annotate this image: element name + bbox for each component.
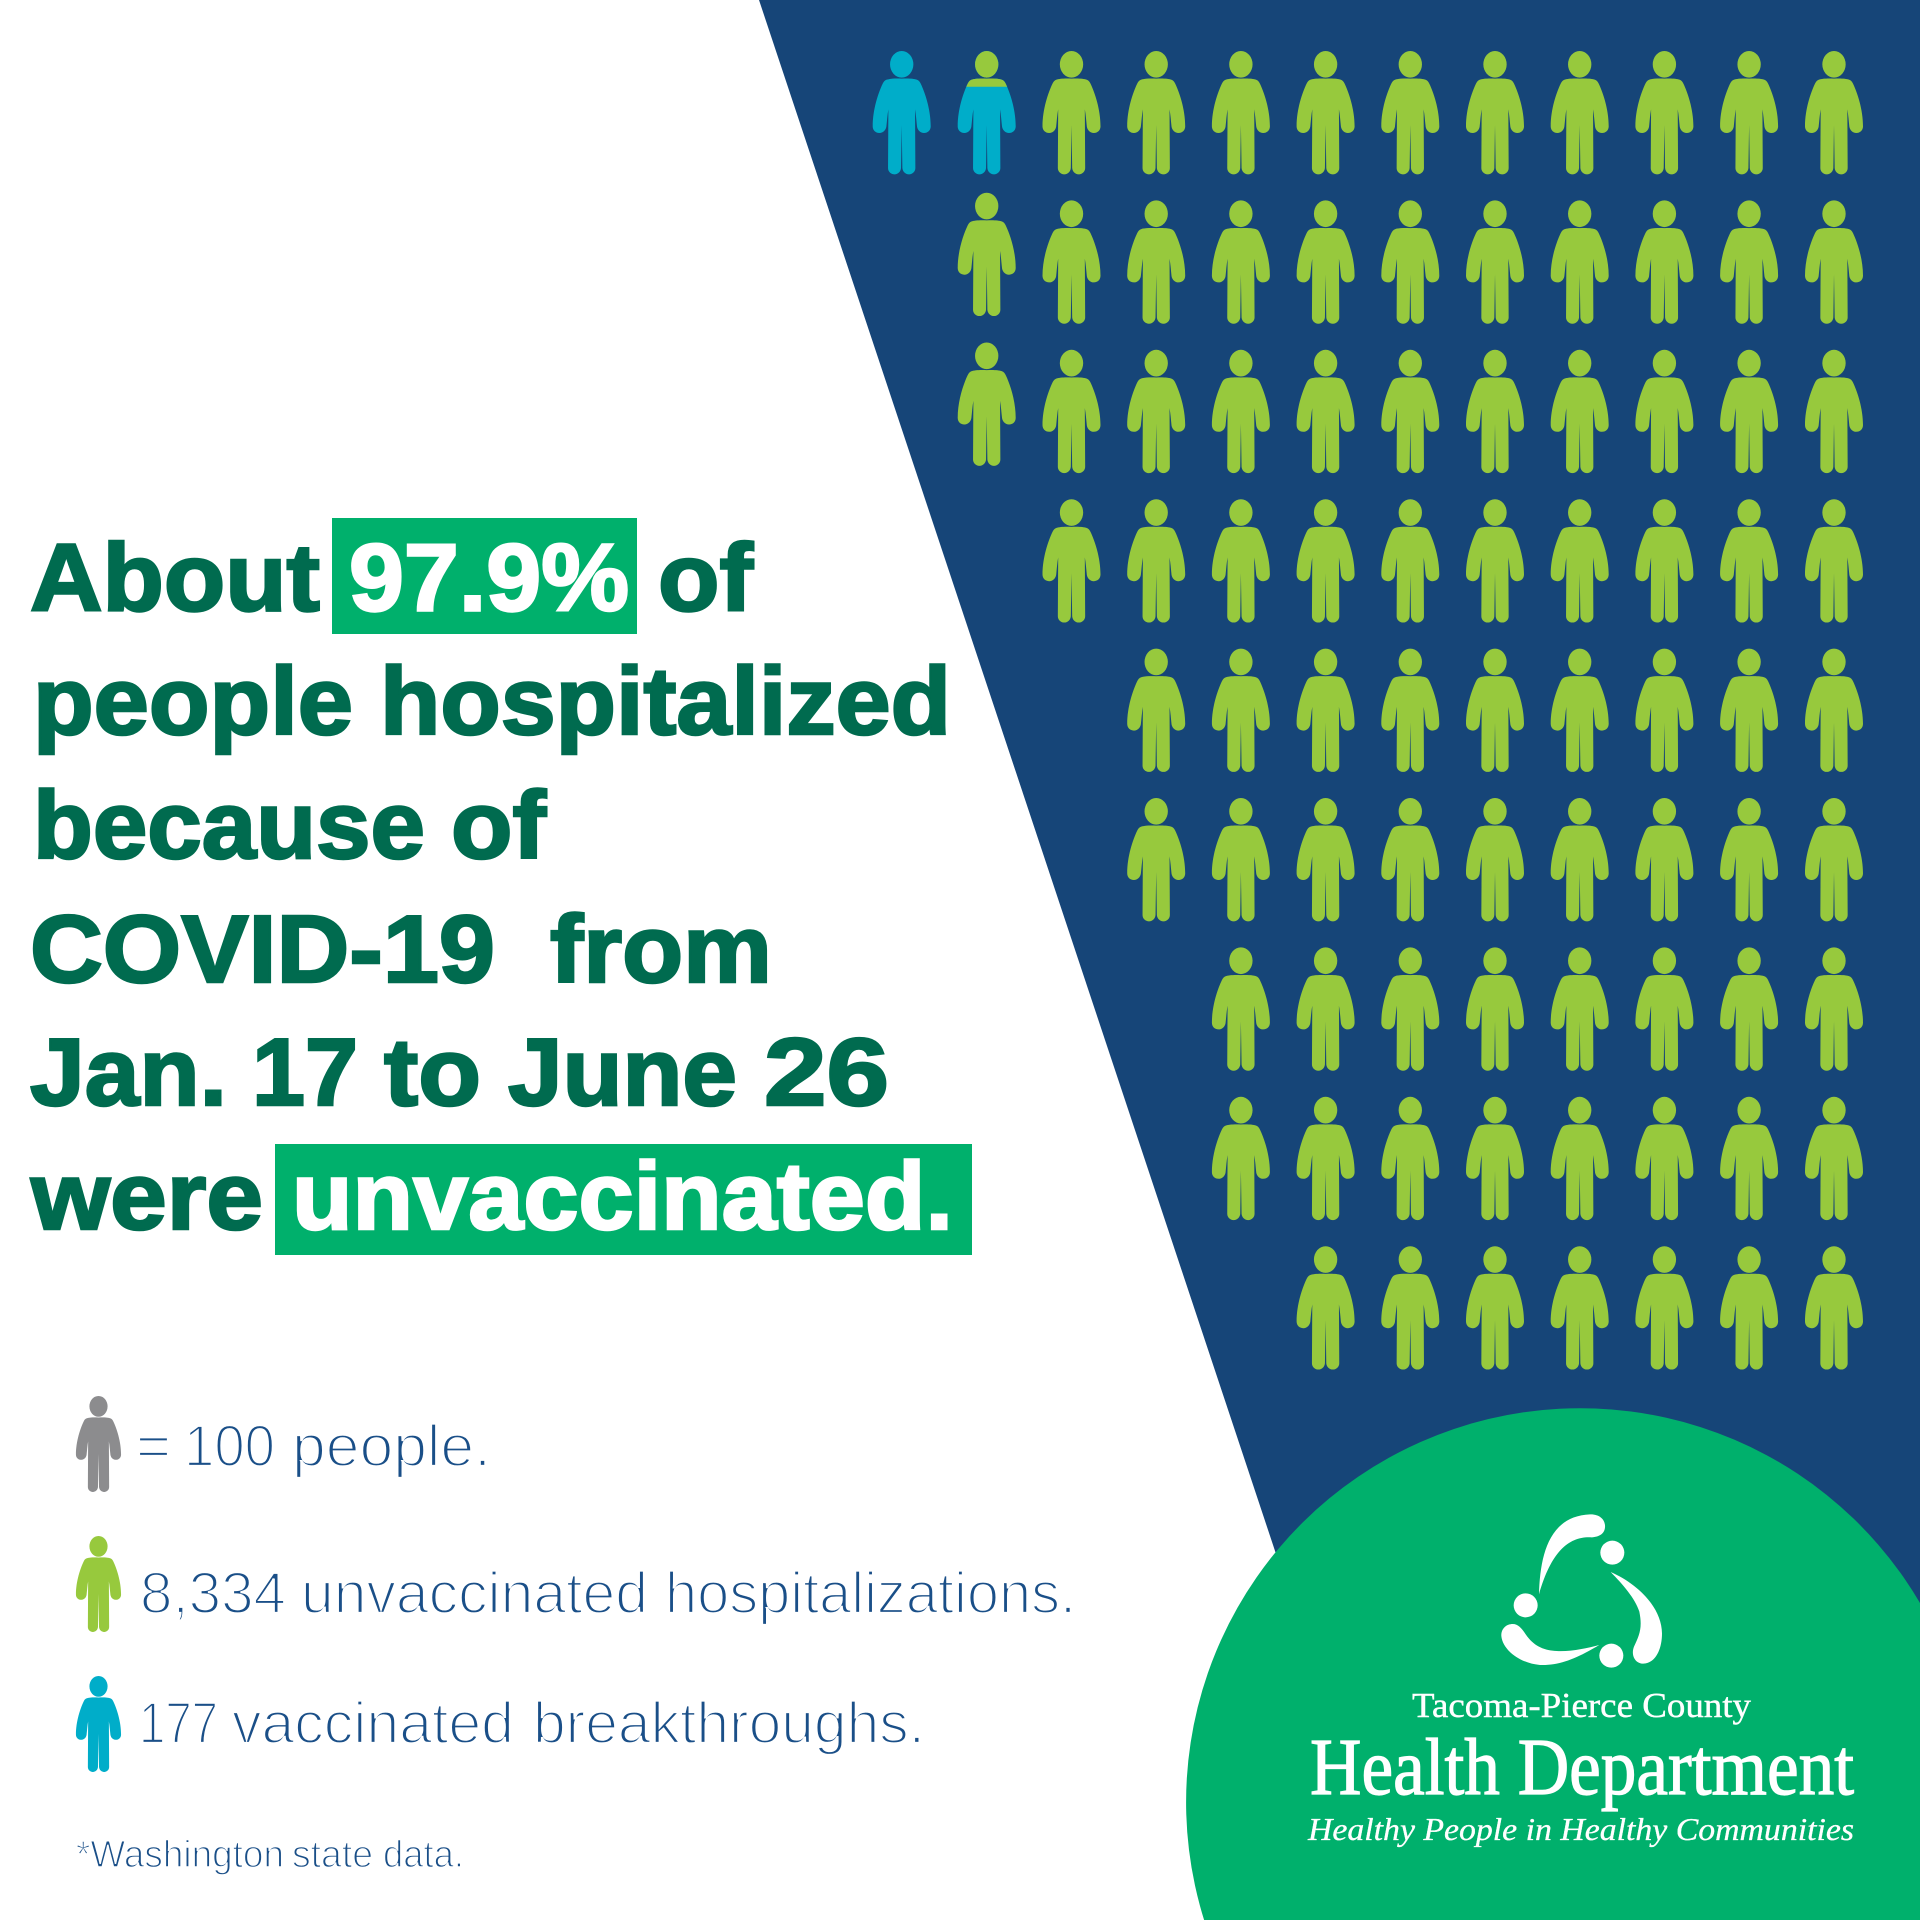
legend text: unvaccinated hospitalizations: 8,334 — [140, 1561, 286, 1626]
legend — [76, 1396, 1076, 1876]
icon: gray person — [76, 1396, 121, 1492]
row 5 of people — [1127, 649, 1863, 772]
footnote: state — [292, 1834, 373, 1876]
icon: green person — [76, 1536, 121, 1632]
row 6 of people — [1127, 798, 1863, 921]
legend text: unvaccinated hospitalizations — [140, 1561, 1076, 1626]
heading line 5: 17 — [252, 1019, 358, 1126]
legend text: vaccinated breakthroughs: vaccinated — [232, 1691, 514, 1756]
heading line 6 — [30, 1143, 953, 1250]
legend text: unvaccinated hospitalizations: unvaccinated — [301, 1561, 648, 1626]
legend text: vaccinated breakthroughs: breakthroughs. — [533, 1691, 925, 1756]
legend item: 100 people — [76, 1396, 491, 1492]
heading line 5: 26 — [764, 1019, 889, 1126]
legend text: 100 people: people. — [292, 1414, 491, 1479]
heading line 5: Jan. — [30, 1019, 227, 1126]
heading line 2 — [33, 648, 951, 755]
panel: green logo circle — [1186, 1408, 1920, 1920]
highlight box: unvaccinated — [275, 1144, 972, 1255]
heading line 6: were — [30, 1143, 263, 1250]
legend text: vaccinated breakthroughs — [139, 1691, 925, 1756]
legend text: 100 people — [136, 1414, 491, 1479]
legend item: unvaccinated — [76, 1536, 1076, 1632]
legend text: vaccinated breakthroughs: 177 — [139, 1691, 218, 1756]
legend text: 100 people: = — [136, 1414, 171, 1479]
heading line 3: because — [33, 772, 425, 879]
footnote: *Washington — [76, 1834, 284, 1876]
pictogram: people grid — [873, 51, 1863, 1370]
row 4 of people — [1043, 499, 1863, 623]
heading line 5 — [30, 1019, 889, 1126]
heading line 4 — [30, 896, 772, 1003]
heading — [30, 518, 972, 1255]
highlight box: 97.9% — [332, 518, 637, 634]
heading line 1: of — [658, 524, 754, 632]
row 8 of people — [1212, 1097, 1863, 1220]
row 9 of people — [1297, 1246, 1863, 1370]
logo: Tacoma-Pierce County Health Department — [1307, 1514, 1854, 1847]
heading line 1: About — [30, 524, 320, 632]
footnote: data. — [383, 1834, 464, 1876]
heading line 5: June — [508, 1019, 737, 1126]
logo text: health department: Health Department — [1310, 1724, 1854, 1812]
row 2 of people — [958, 193, 1863, 324]
heading line 6: unvaccinated. — [292, 1143, 953, 1250]
heading line 2: people — [33, 648, 353, 755]
row 3 of people — [958, 342, 1863, 473]
heading line 4: COVID-19 — [30, 896, 495, 1003]
heading line 1: 97.9% — [349, 524, 629, 632]
logo text: county: Tacoma-Pierce County — [1412, 1686, 1752, 1725]
heading line 3: of — [451, 772, 547, 879]
logo text: tagline: Healthy People in Healthy Communities — [1307, 1811, 1854, 1847]
panel: navy diagonal background — [759, 0, 1920, 1700]
footnote — [76, 1834, 464, 1876]
heading line 5: to — [384, 1019, 481, 1126]
legend text: 100 people: 100 — [184, 1414, 275, 1479]
icon: three-figure emblem — [1501, 1514, 1662, 1668]
row 1 of people — [873, 51, 1863, 174]
heading line 4: from — [550, 896, 772, 1003]
legend item: vaccinated — [76, 1676, 925, 1772]
legend text: unvaccinated hospitalizations: hospitalizations. — [665, 1561, 1076, 1626]
icon: cyan person — [76, 1676, 121, 1772]
heading line 2: hospitalized — [380, 648, 951, 755]
row 7 of people — [1212, 947, 1863, 1071]
heading line 1 — [30, 524, 754, 632]
